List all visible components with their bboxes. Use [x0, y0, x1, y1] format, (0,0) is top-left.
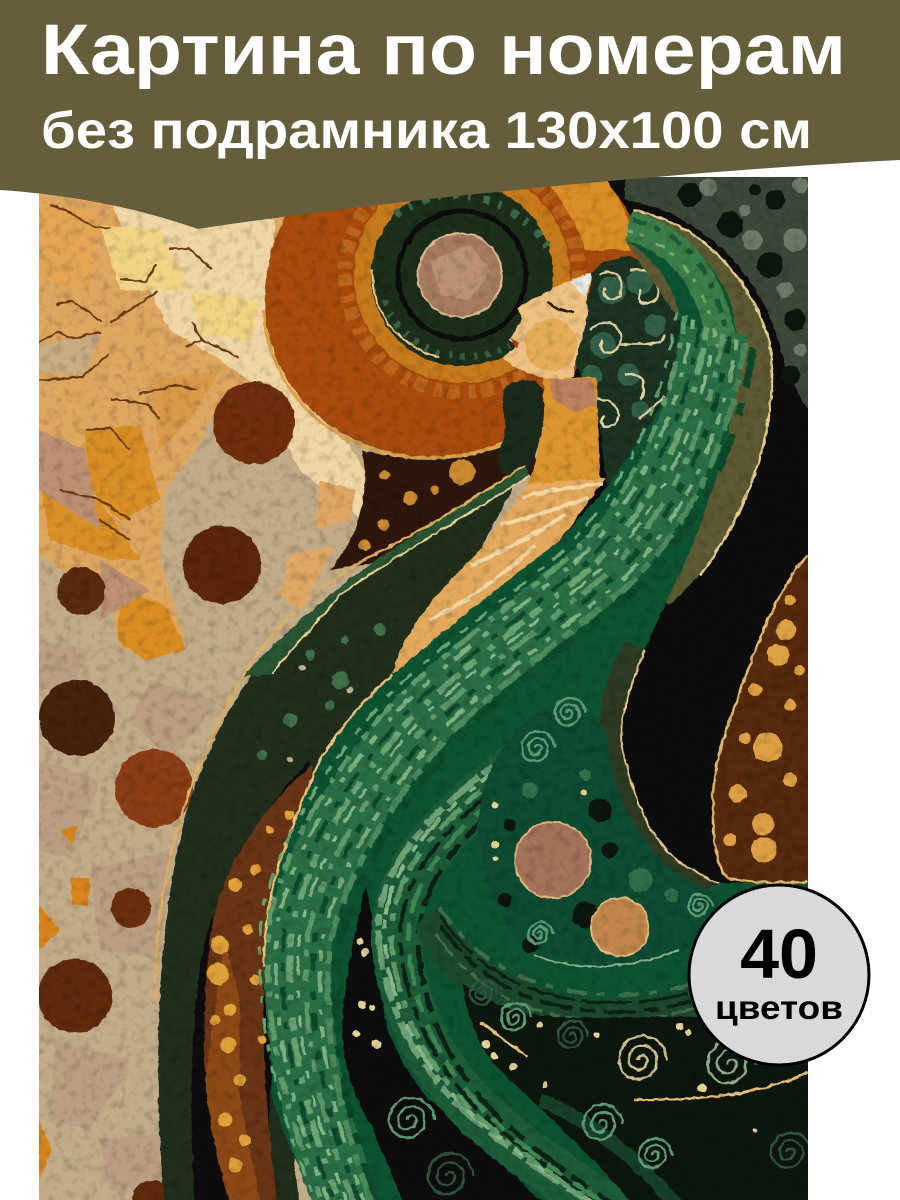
olive hair outer band [625, 210, 772, 606]
woman face [503, 273, 592, 379]
dark green swoosh [155, 465, 530, 1200]
title: Картина по номерам [41, 11, 846, 90]
dark green ring with rose disc [371, 184, 553, 366]
dark hair patch left of neck [498, 380, 544, 476]
woman neck [528, 377, 600, 484]
paint texture overlay [39, 177, 808, 1200]
subtitle: без подрамника 130х100 см [41, 102, 812, 160]
pool of dark green with discs [478, 710, 720, 967]
badge: 40 colours: 40 [740, 915, 818, 993]
background: grey-green swirls top right [624, 177, 808, 409]
hair strands texture [260, 220, 753, 1200]
swirl zone on black [463, 983, 830, 1200]
background: brown circles [38, 382, 295, 1200]
hair tail sweep [415, 880, 808, 1030]
spirals [389, 698, 810, 1194]
big orange sun [264, 158, 640, 457]
badge: 40 colours [689, 885, 869, 1065]
bronze discs on green [515, 822, 649, 956]
background: black right field [560, 180, 808, 884]
woman draped shoulder [392, 478, 606, 676]
gold dotted brown band lower left [204, 765, 312, 1200]
background: cracks [39, 205, 239, 540]
olive header banner [0, 0, 900, 229]
black wedge with dots [342, 885, 560, 1200]
background: upper left orange and cream paint [20, 160, 369, 1190]
gold dotted band under sun [330, 448, 536, 570]
background: beige wall [39, 396, 560, 1200]
right gold dotted ribbon [710, 554, 808, 884]
badge: 40 colours: цветов [715, 989, 843, 1026]
second hair strand [378, 748, 646, 1200]
curly hair behind head [575, 257, 680, 487]
main hair mass [264, 227, 830, 1200]
